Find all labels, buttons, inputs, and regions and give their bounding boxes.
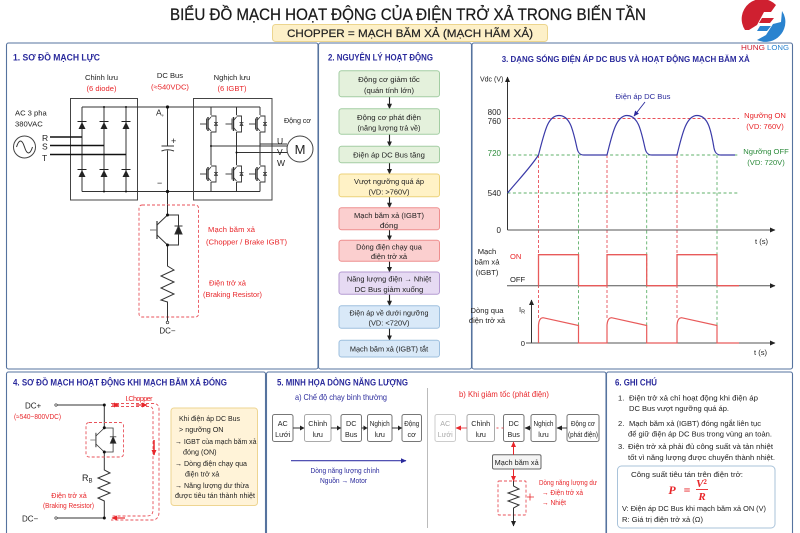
diagram: braking mode: Động cơ	[571, 419, 595, 428]
chart: DC bus voltage: Điện áp DC Bus	[616, 92, 671, 101]
diagram: normal mode: Dòng năng lượng chính	[310, 466, 380, 475]
logo: Hung Long	[741, 0, 789, 52]
icon: AC source	[14, 136, 36, 158]
step: bus voltage rises: Điện áp DC Bus tăng	[353, 150, 425, 159]
formula box: V: Điện áp DC Bus khi mạch băm xả ON (V)	[622, 504, 766, 513]
notes list: Điện trở xả phải đủ công suất và tản nhiệt	[628, 442, 774, 451]
chart: chopper state	[475, 247, 775, 286]
diagram: normal mode: Bus	[345, 430, 358, 439]
panel: energy flow	[266, 372, 606, 533]
chopper and braking resistor: Điện trở xả	[209, 278, 247, 288]
notes list: Điện trở xả chỉ hoạt động khi điện áp	[629, 394, 758, 402]
diagram: normal mode: Chỉnh	[308, 419, 327, 428]
heading: chopper on circuit: 4. SƠ ĐỒ MẠCH HOẠT ĐỘNG KHI MẠCH BĂM XẢ ĐÓNG	[13, 376, 227, 388]
diagram: normal mode: Lưới	[275, 430, 291, 439]
diagram: braking mode: Chỉnh	[471, 419, 490, 428]
diagram: normal mode: AC	[278, 419, 288, 428]
icon: motor: M	[295, 142, 305, 157]
diagram: normal mode: DC	[346, 419, 356, 428]
step: energy to heat	[339, 272, 440, 294]
diagram: normal mode: Nguồn → Motor	[320, 476, 368, 485]
subtitle banner	[272, 24, 548, 42]
circuit: chopper conducting: Điện trở xả	[51, 491, 87, 500]
callout: chopper explanation: → IGBT của mạch băm xả	[175, 437, 256, 446]
diagram: normal mode: lưu	[374, 430, 385, 439]
diagram: normal mode: Nghịch	[370, 419, 390, 428]
diagram: braking mode: DC	[509, 419, 519, 428]
chart: DC bus voltage: (VD: 760V)	[746, 122, 784, 131]
logo: Hung Long: HUNG	[741, 43, 765, 52]
inverter bridge	[194, 98, 287, 200]
chopper and braking resistor	[139, 205, 287, 336]
chart: resistor current: R	[521, 310, 525, 316]
heading: operating principle: 2. NGUYÊN LÝ HOẠT ĐỘNG	[328, 52, 433, 62]
panel: power circuit	[6, 43, 318, 369]
callout: chopper explanation: > ngưỡng ON	[179, 425, 224, 434]
labels: circuit stages: 380VAC	[15, 120, 43, 128]
threshold and switching guides	[508, 118, 739, 325]
chart: chopper state: (IGBT)	[476, 268, 499, 277]
circuit: chopper conducting: DC+	[25, 402, 42, 410]
notes list: 2.	[618, 419, 624, 428]
labels: circuit stages: Chỉnh lưu	[85, 73, 118, 82]
notes list	[618, 394, 775, 462]
chart: DC bus voltage	[480, 76, 789, 246]
diagram: braking mode: lưu	[475, 430, 486, 439]
diagram: braking mode: Mạch băm xả	[495, 458, 539, 467]
icon: motor: W	[277, 158, 285, 168]
circuit: chopper conducting: (≈540~800VDC)	[14, 412, 61, 421]
step: motor decelerates	[339, 71, 440, 97]
chart: DC bus voltage: (VD: 720V)	[747, 158, 785, 167]
labels: circuit stages: (≈540VDC)	[151, 82, 189, 92]
step: energy to heat: Năng lượng điện → Nhiệt	[347, 275, 432, 284]
diagram: normal mode: lưu	[312, 430, 323, 439]
circuit: chopper conducting: DC−	[22, 514, 39, 524]
step: overvoltage: Vượt ngưỡng quá áp	[354, 177, 424, 186]
formula box: P	[668, 483, 676, 497]
labels: circuit stages: (6 diode)	[87, 84, 117, 93]
chart: chopper state: ON	[510, 252, 521, 261]
heading: waveforms: 3. DẠNG SÓNG ĐIỆN ÁP DC BUS VÀ HOẠT ĐỘNG MẠCH BĂM XẢ	[502, 53, 750, 64]
step: overvoltage	[339, 174, 440, 197]
diagram: braking mode	[435, 390, 599, 526]
chart: DC bus voltage: 540	[488, 189, 502, 198]
logo: Hung Long: LONG	[767, 43, 789, 52]
diagram: braking mode: Bus	[508, 430, 520, 439]
chart: resistor current: t (s)	[754, 348, 768, 357]
labels: circuit stages	[15, 71, 311, 128]
step: motor decelerates: Động cơ giảm tốc	[358, 75, 420, 84]
formula box: =	[684, 483, 691, 497]
step: current through resistor: điện trở xả	[371, 252, 408, 261]
callout: chopper explanation	[171, 408, 258, 506]
title: BIỂU ĐỒ MẠCH HOẠT ĐỘNG CỦA ĐIỆN TRỞ XẢ TRONG BIẾN TẦN	[170, 5, 646, 24]
callout: chopper explanation: điện trở xả	[185, 470, 219, 478]
flowchart arrows	[388, 97, 390, 340]
rectifier bridge: S	[42, 142, 48, 152]
notes list: Mạch băm xả (IGBT) đóng ngắt liên tục	[629, 419, 761, 428]
notes list: để giữ điện áp DC Bus trong vùng an toàn.	[628, 430, 772, 438]
step: voltage below threshold: Điện áp về dưới ngưỡng	[350, 308, 428, 317]
icon: motor	[277, 136, 313, 168]
heading: energy flow: 5. MINH HỌA DÒNG NĂNG LƯỢNG	[277, 376, 408, 388]
chart: DC bus voltage: 720	[488, 149, 502, 158]
callout: chopper explanation: Khi điện áp DC Bus	[179, 414, 240, 423]
diagram: braking mode: Lưới	[438, 430, 453, 439]
rectifier bridge	[42, 98, 138, 200]
circuit: chopper conducting	[14, 402, 124, 524]
formula box: 2	[703, 478, 707, 486]
DC bus rails and capacitor	[82, 105, 260, 205]
diagram: braking mode: AC	[440, 419, 450, 428]
chopper and braking resistor: (Chopper / Brake IGBT)	[206, 238, 287, 246]
diagram: normal mode: a) Chế độ chạy bình thường	[295, 393, 387, 402]
callout: chopper explanation: → Năng lượng dư thừa	[175, 481, 249, 490]
diagram: braking mode: lưu	[538, 430, 549, 439]
chart: chopper state: OFF	[510, 275, 526, 284]
labels: circuit stages: DC Bus	[157, 71, 183, 80]
diagram: braking mode: → Nhiệt	[542, 498, 566, 507]
diagram: normal mode	[272, 393, 422, 485]
circuit: chopper conducting: R	[82, 473, 88, 483]
DC bus rails and capacitor: A,	[156, 108, 164, 118]
labels: circuit stages: Nghịch lưu	[214, 73, 250, 82]
step: chopper on: đóng	[380, 221, 398, 230]
step: motor decelerates: (quán tính lớn)	[364, 86, 414, 95]
step: motor generates: (năng lượng trả về)	[358, 124, 421, 133]
heading: power circuit: 1. SƠ ĐỒ MẠCH LỰC	[13, 52, 101, 62]
formula box: R	[697, 491, 706, 503]
chart: DC bus voltage: 0	[497, 226, 502, 235]
chart: DC bus voltage: Ngưỡng ON	[744, 111, 786, 120]
diagram: braking mode: → Điện trở xả	[542, 488, 583, 497]
rectifier bridge: T	[42, 153, 47, 163]
panel: chopper on circuit	[6, 372, 266, 533]
formula box: R: Giá trị điện trở xả (Ω)	[622, 515, 703, 524]
subtitle banner: CHOPPER = MẠCH BĂM XẢ (MẠCH HÃM XẢ)	[287, 27, 533, 40]
callout: chopper explanation: → Dòng điện chạy qua	[175, 459, 247, 468]
step: voltage below threshold	[339, 306, 440, 328]
chopper and braking resistor: Mạch băm xả	[208, 225, 256, 234]
DC bus rails and capacitor: +	[171, 136, 176, 146]
labels: circuit stages: Động cơ	[284, 116, 311, 125]
step: chopper on: Mạch băm xả (IGBT)	[354, 211, 424, 220]
notes list: tốt vì năng lượng được chuyển thành nhiệt.	[628, 453, 775, 462]
notes list: 1.	[618, 394, 624, 402]
step: motor generates: Động cơ phát điện	[357, 113, 421, 122]
panel: operating principle	[318, 43, 472, 369]
step: overvoltage: (VD: >760V)	[368, 187, 410, 196]
chart: DC bus voltage: t (s)	[755, 237, 769, 246]
chart: resistor current: I	[519, 305, 521, 314]
chart: DC bus voltage: Ngưỡng OFF	[743, 147, 789, 156]
chart: DC bus voltage: Vdc (V)	[480, 76, 503, 84]
diagram: braking mode: b) Khi giảm tốc (phát điện)	[459, 390, 549, 399]
step: motor generates	[339, 109, 440, 134]
panel: waveforms	[469, 43, 792, 369]
chart: DC bus voltage: 800	[488, 108, 502, 117]
chopper and braking resistor: DC−	[159, 326, 176, 336]
chopper and braking resistor: (Braking Resistor)	[203, 290, 262, 299]
diagram: braking mode: Dòng năng lượng dư	[539, 478, 597, 487]
chart: DC bus voltage: 760	[488, 117, 502, 126]
step: energy to heat: DC Bus giảm xuống	[355, 285, 423, 294]
chart: chopper state: băm xả	[475, 258, 500, 266]
chart: resistor current: điện trở xả	[469, 316, 506, 325]
labels: circuit stages: (6 IGBT)	[217, 84, 247, 93]
circuit: chopper conducting: B	[88, 478, 93, 484]
diagram: normal mode: Động	[404, 419, 419, 428]
circuit: chopper conducting: (Braking Resistor)	[43, 501, 94, 510]
labels: circuit stages: AC 3 pha	[15, 108, 47, 118]
diagram: normal mode: cơ	[408, 430, 416, 439]
step: bus voltage rises	[339, 146, 440, 163]
callout: chopper explanation: được tiêu tán thành nhiệt	[175, 491, 255, 500]
icon: motor: V	[277, 147, 283, 157]
icon: motor: U	[277, 136, 283, 146]
callout: chopper explanation: đóng (ON)	[183, 448, 217, 456]
rectifier bridge: R	[42, 133, 48, 143]
notes list: DC Bus vượt ngưỡng quá áp.	[629, 404, 729, 413]
formula box: Công suất tiêu tán trên điện trở:	[631, 470, 743, 479]
formula box: V	[696, 478, 703, 490]
chart: resistor current: 0	[521, 339, 525, 348]
chart: resistor current: Dòng qua	[471, 306, 504, 315]
formula box	[618, 466, 775, 528]
diagram: braking mode: (phát điện)	[568, 430, 598, 439]
heading: notes: 6. GHI CHÚ	[615, 376, 657, 388]
panel: notes	[606, 372, 792, 533]
step: chopper off	[339, 340, 440, 357]
diagram: braking mode: Nghịch	[534, 419, 554, 428]
chart: resistor current	[469, 300, 775, 357]
arrow: chopper current path	[111, 394, 159, 520]
step: voltage below threshold: (VD: <720V)	[368, 319, 410, 328]
DC bus rails and capacitor: −	[157, 178, 162, 188]
step: chopper off: Mạch băm xả (IGBT) tắt	[350, 345, 429, 354]
arrow: chopper current path: I.Chopper	[126, 394, 153, 403]
step: chopper on	[339, 208, 440, 230]
chart: chopper state: Mạch	[478, 247, 496, 256]
step: current through resistor: Dòng điện chạy qua	[356, 242, 423, 251]
step: current through resistor	[339, 240, 440, 261]
notes list: 3.	[618, 442, 624, 451]
